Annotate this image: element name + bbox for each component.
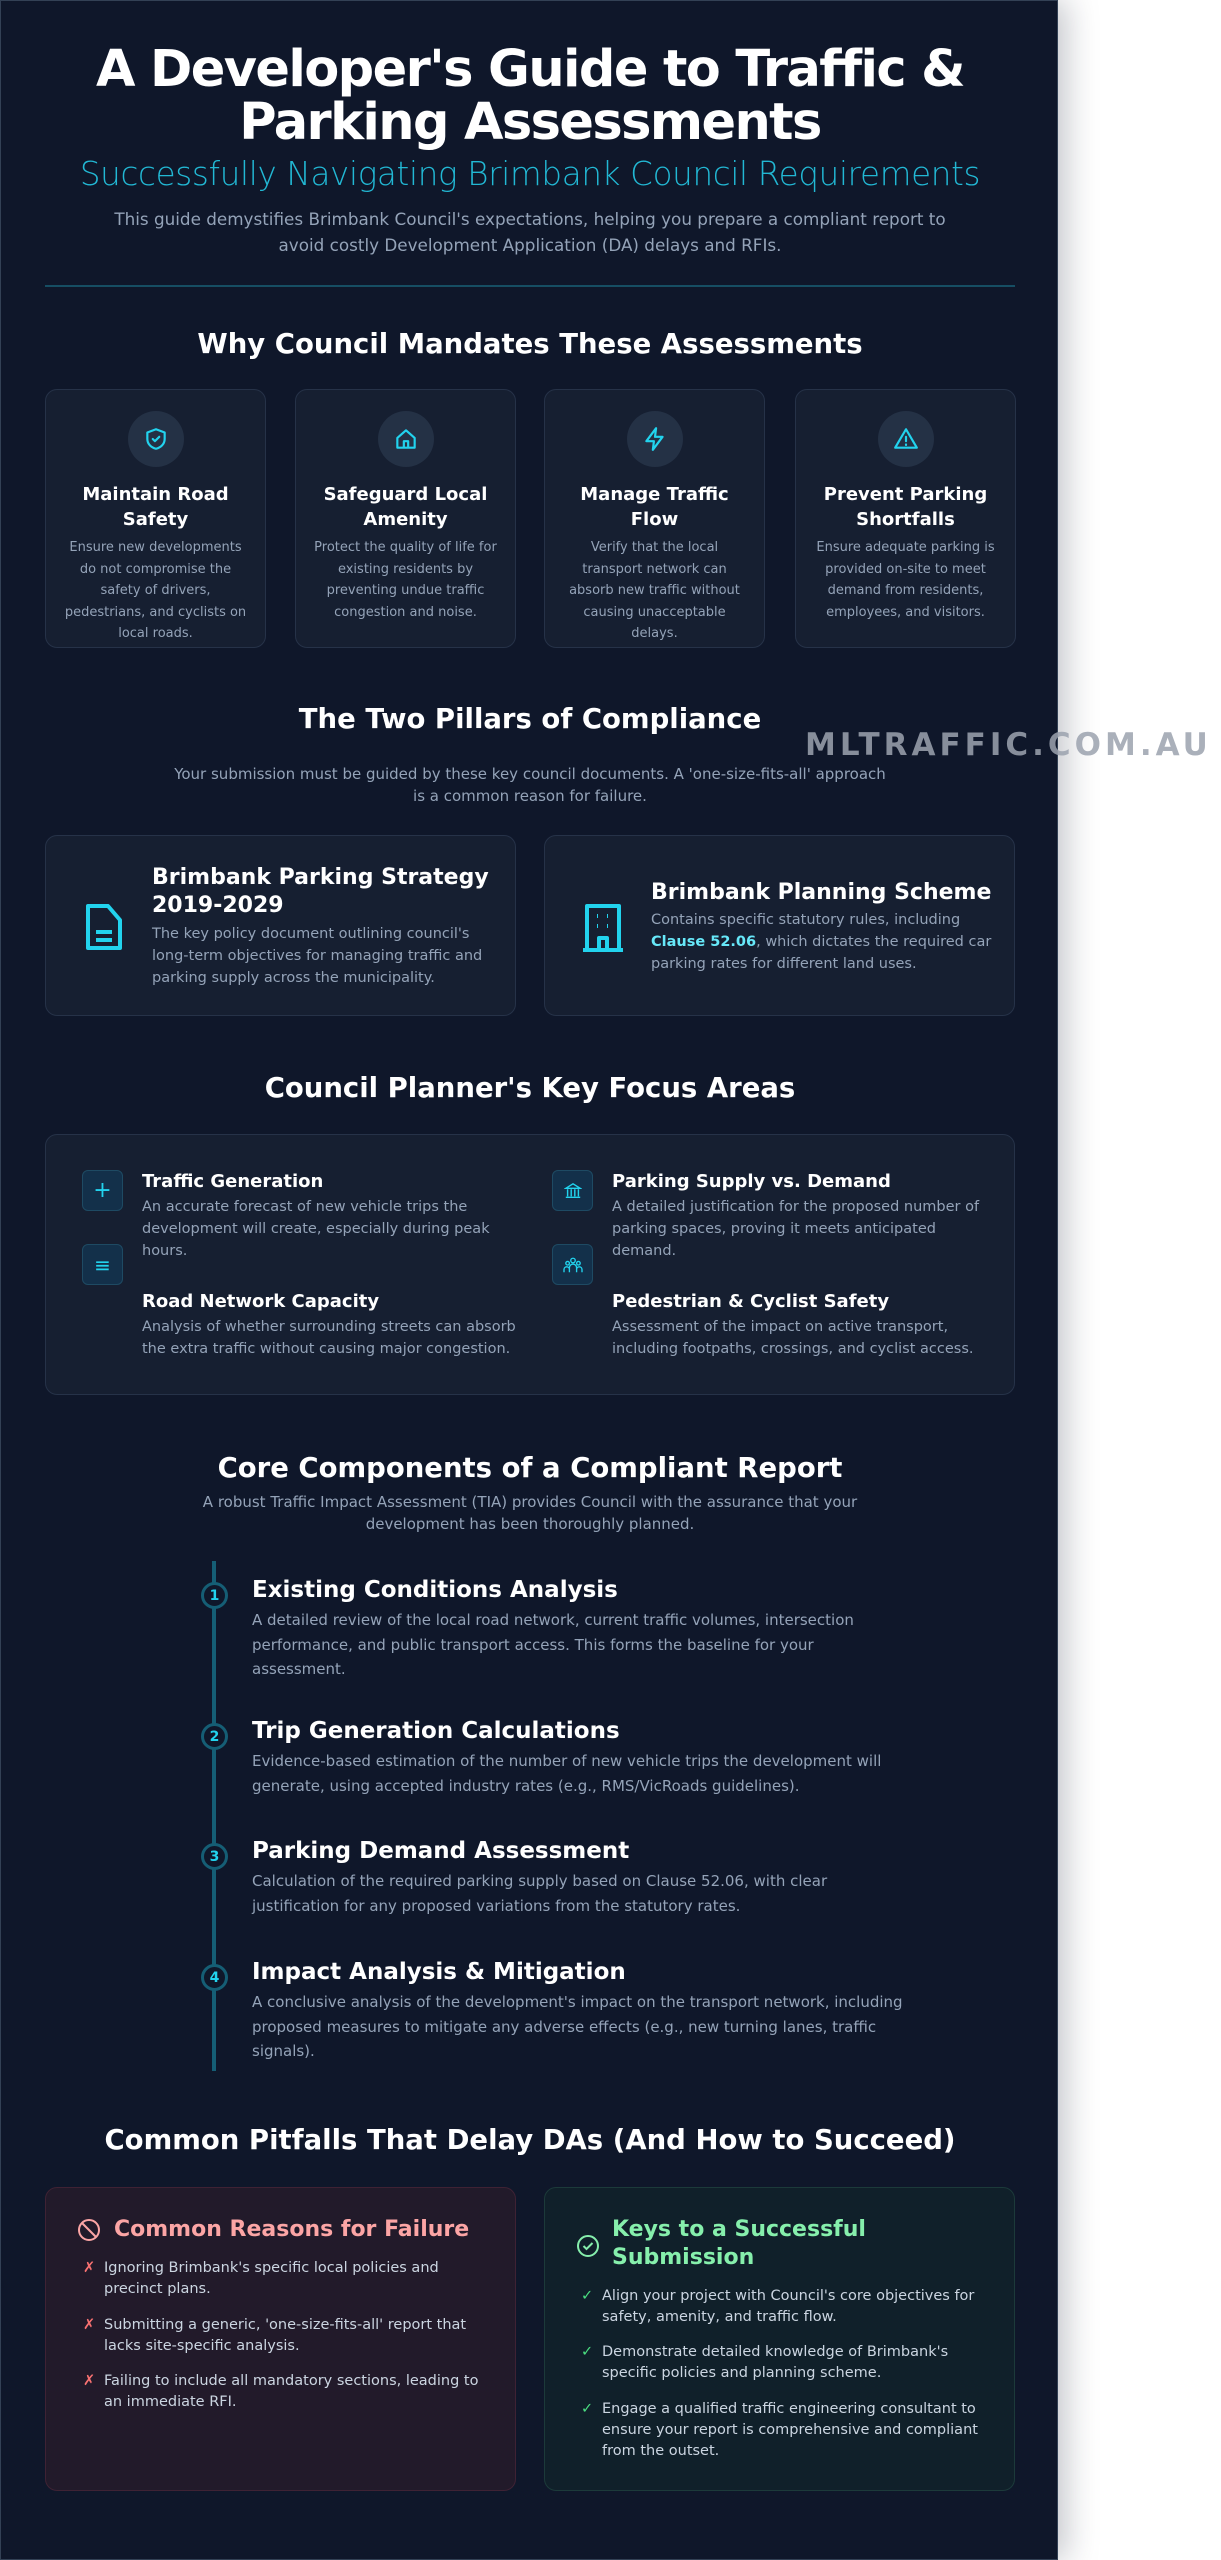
title: Parking Assessments (239, 93, 821, 152)
title (96, 40, 964, 152)
intro text: This guide demystifies Brimbank Council's expectations, helping you prepare a compliant report to avoid costly Development Application (DA) delays and RFIs. (114, 209, 946, 255)
watermark: MLTRAFFIC.COM.AU (805, 727, 1212, 763)
step 2: Evidence-based estimation of the number of new vehicle trips the development will generate, using accepted industry rates (e.g., RMS/VicRoads guidelines). (252, 1752, 881, 1794)
heading: pitfalls: Common Pitfalls That Delay DAs (And How to Succeed) (104, 2124, 955, 2156)
panel: success keys: Demonstrate detailed knowledge of Brimbank's specific policies and planning scheme. (602, 2344, 948, 2381)
card: traffic flow (544, 389, 765, 648)
card: traffic flow: Flow (631, 509, 678, 530)
panel: failure reasons: ✗ (83, 2317, 95, 2333)
card: parking shortfalls (795, 389, 1016, 648)
panel: failure reasons: Common Reasons for Failure (114, 2217, 469, 2242)
icon: document (86, 904, 122, 950)
icon: warning (878, 411, 934, 467)
pillar: parking strategy: Brimbank Parking Strategy (152, 865, 489, 890)
card: road safety: Ensure new developments do not compromise the safety of drivers, pedestrians, and cyclists on local roads. (65, 540, 246, 641)
step 4 (201, 1959, 903, 2060)
step 3: 3 (210, 1848, 219, 1864)
item: parking supply (552, 1170, 980, 1259)
pillar: parking strategy (45, 835, 516, 1016)
item: pedestrian safety: Assessment of the impact on active transport, including footpaths, crossings, and cyclist access. (612, 1319, 974, 1357)
icon: ban (78, 2219, 100, 2241)
step 1: 1 (210, 1588, 219, 1604)
card: amenity: Amenity (363, 509, 448, 530)
item: pedestrian safety (552, 1244, 974, 1357)
step 1: A detailed review of the local road network, current traffic volumes, intersection performance, and public transport access. This forms the baseline for your assessment. (252, 1611, 854, 1678)
step 1 (201, 1577, 854, 1678)
panel: failure reasons: ✗ (83, 2260, 95, 2276)
card: road safety: Safety (123, 509, 188, 530)
card: amenity: Protect the quality of life for existing residents by preventing undue traffic congestion and noise. (314, 540, 497, 620)
card: parking shortfalls: Prevent Parking (824, 484, 987, 505)
card: road safety (45, 389, 266, 648)
item: traffic generation: Traffic Generation (142, 1171, 323, 1192)
panel: failure reasons: Submitting a generic, 'one-size-fits-all' report that lacks site-specific analysis. (104, 2317, 466, 2354)
pillar: planning scheme: Contains specific statutory rules, including Clause 52.06, which dictates the required car parking rates for different land uses. (651, 912, 991, 972)
card: parking shortfalls: Shortfalls (856, 509, 955, 530)
step 4: A conclusive analysis of the development's impact on the transport network, including proposed measures to mitigate any adverse effects (e.g., new turning lanes, traffic signals). (252, 1993, 903, 2060)
step 4: Impact Analysis & Mitigation (252, 1959, 626, 1985)
step 2: 2 (210, 1728, 219, 1744)
icon: lightning (627, 411, 683, 467)
item: road network: ≡ (94, 1252, 111, 1276)
item: parking supply: Parking Supply vs. Demand (612, 1171, 891, 1192)
panel: success keys: Submission (612, 2245, 754, 2270)
item: parking supply: A detailed justification for the proposed number of parking spaces, proving it meets anticipated demand. (612, 1199, 979, 1259)
card: traffic flow: Manage Traffic (580, 484, 729, 505)
item: traffic generation: + (93, 1178, 112, 1203)
panel: success keys: Align your project with Council's core objectives for safety, amenity, and traffic flow. (602, 2288, 974, 2325)
timeline (201, 1561, 903, 2071)
panel: success keys: ✓ (581, 2344, 593, 2360)
pillar: parking strategy: The key policy document outlining council's long-term objectives for managing traffic and parking supply across the municipality. (152, 926, 482, 986)
panel: failure reasons (45, 2187, 516, 2491)
step 1: Existing Conditions Analysis (252, 1577, 618, 1603)
card: amenity (295, 389, 516, 648)
heading: two pillars: The Two Pillars of Compliance (299, 703, 761, 735)
item: road network: Analysis of whether surrounding streets can absorb the extra traffic without causing major congestion. (142, 1319, 516, 1357)
pillar: planning scheme: Brimbank Planning Scheme (651, 880, 991, 905)
pillar: parking strategy: 2019-2029 (152, 893, 284, 918)
intro: core components: A robust Traffic Impact Assessment (TIA) provides Council with the assurance that your development has been thoroughly planned. (203, 1493, 857, 1533)
card: amenity: Safeguard Local (324, 484, 487, 505)
item: traffic generation (82, 1170, 490, 1259)
panel: focus areas (45, 1134, 1015, 1395)
card: traffic flow: Verify that the local transport network can absorb new traffic without causing unacceptable delays. (569, 540, 740, 641)
panel: failure reasons: Ignoring Brimbank's specific local policies and precinct plans. (104, 2260, 439, 2297)
icon: check circle (577, 2235, 599, 2257)
panel: success keys: Engage a qualified traffic engineering consultant to ensure your report is comprehensive and compliant from the outset. (602, 2401, 978, 2459)
heading: why council: Why Council Mandates These Assessments (197, 328, 863, 360)
panel: failure reasons: Failing to include all mandatory sections, leading to an immediate RFI. (104, 2373, 478, 2410)
icon: house (378, 411, 434, 467)
card: parking shortfalls: Ensure adequate parking is provided on-site to meet demand from residents, employees, and visitors. (816, 540, 995, 620)
item: traffic generation: An accurate forecast of new vehicle trips the development will create, especially during peak hours. (142, 1199, 490, 1259)
heading: core components: Core Components of a Compliant Report (218, 1452, 842, 1484)
panel: success keys: Keys to a Successful (612, 2217, 866, 2242)
step 4: 4 (210, 1970, 219, 1986)
item: road network (82, 1244, 516, 1357)
pillar: planning scheme (544, 835, 1015, 1016)
panel: failure reasons: ✗ (83, 2373, 95, 2389)
item: road network: Road Network Capacity (142, 1291, 379, 1312)
subtitle: Successfully Navigating Brimbank Council Requirements (80, 155, 980, 193)
step 3 (201, 1838, 828, 1914)
icon: shield (128, 411, 184, 467)
icon: building (583, 904, 623, 952)
step 3: Parking Demand Assessment (252, 1838, 629, 1864)
title: A Developer's Guide to Traffic & (96, 40, 964, 99)
panel: success keys: ✓ (581, 2288, 593, 2304)
heading: focus areas: Council Planner's Key Focus Areas (265, 1072, 795, 1104)
step 2 (201, 1718, 881, 1794)
step 3: Calculation of the required parking supply based on Clause 52.06, with clear justification for any proposed variations from the statutory rates. (252, 1872, 827, 1914)
panel: success keys (544, 2187, 1015, 2491)
card: road safety: Maintain Road (82, 484, 229, 505)
panel: success keys: ✓ (581, 2401, 593, 2417)
step 2: Trip Generation Calculations (252, 1718, 620, 1744)
item: pedestrian safety: Pedestrian & Cyclist Safety (612, 1291, 889, 1312)
intro: pillars: Your submission must be guided by these key council documents. A 'one-size-fits-all' approach is a common reason for failure. (174, 765, 886, 805)
